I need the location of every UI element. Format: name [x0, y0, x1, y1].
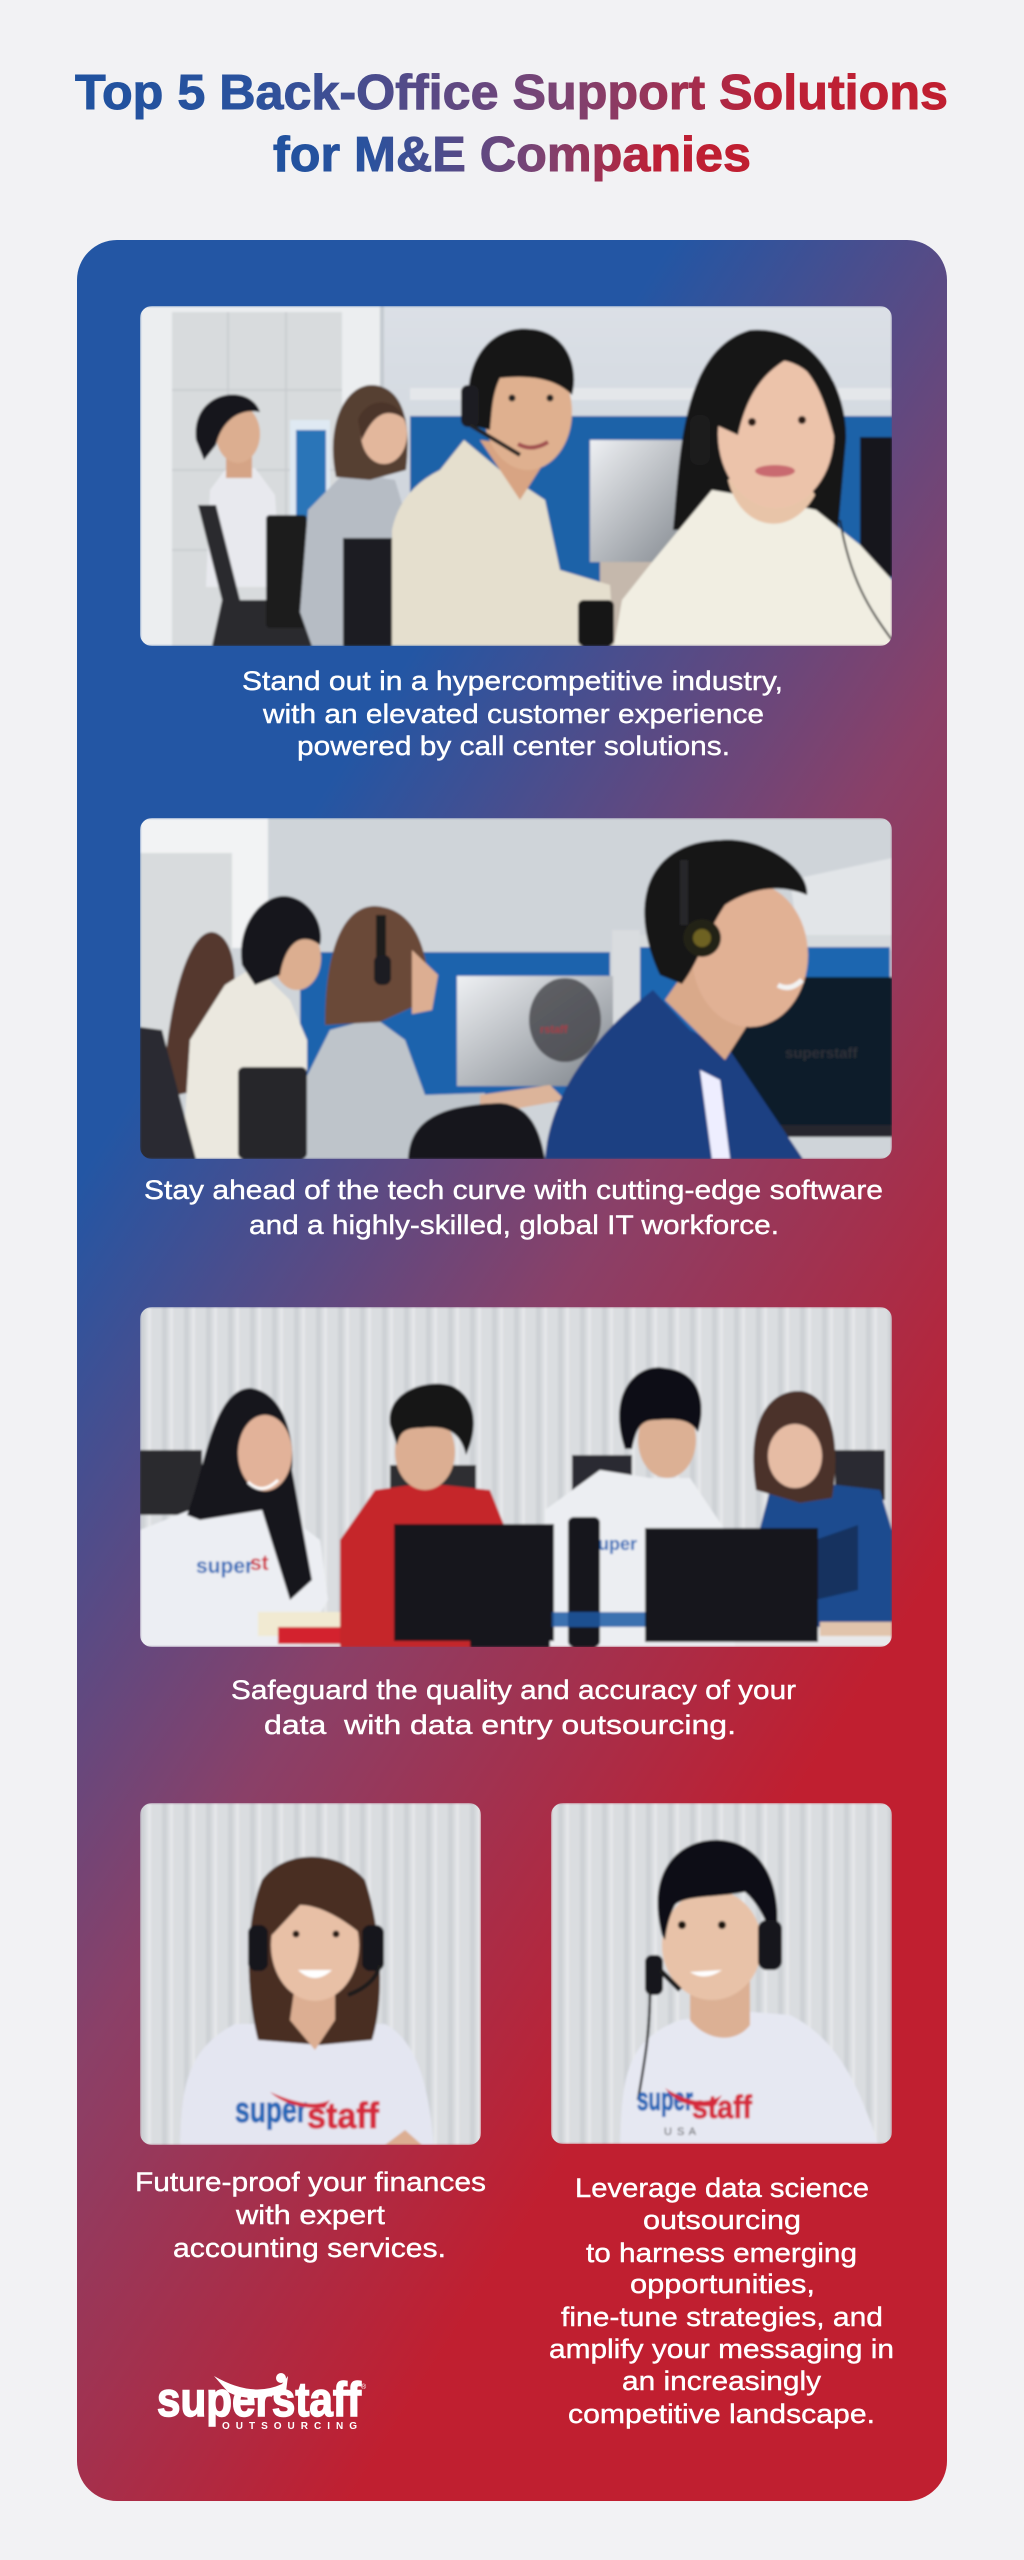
caption: data science: fine-tune strategies, and [561, 2302, 883, 2332]
photo: data science agent: staff [692, 2089, 752, 2125]
caption: data science: amplify your messaging in [549, 2334, 894, 2364]
title: Top 5 Back-Office Support Solutions [75, 66, 948, 120]
photo: accounting agent: staff [307, 2095, 380, 2136]
caption: accounting: with expert [235, 2200, 386, 2230]
photo: data science agent [551, 1803, 892, 2144]
caption: data entry: data with data entry outsourcing. [264, 1710, 736, 1740]
photo: data entry team with laptops [140, 1307, 892, 1647]
chair front [408, 1103, 545, 1159]
man in white tee: uper [598, 1534, 637, 1554]
woman in white tee: st [250, 1552, 269, 1575]
caption: tech curve: and a highly-skilled, global IT workforce. [249, 1210, 779, 1240]
woman in navy tee [741, 1391, 892, 1636]
logo: SuperStaff Outsourcing: OUTSOURCING [222, 2421, 357, 2432]
title [75, 66, 948, 182]
photo: data science agent: super [637, 2081, 693, 2117]
woman foreground [614, 330, 892, 646]
caption: data science: an increasingly [622, 2366, 822, 2396]
long-hair woman at back [163, 932, 235, 1098]
photo: call center team with headsets [140, 306, 892, 646]
man in white tee [546, 1366, 721, 1632]
caption: data science: Leverage data science [575, 2173, 869, 2203]
man with headset [390, 327, 616, 646]
laptop left [394, 1524, 554, 1641]
photo: accounting agent [140, 1803, 481, 2145]
caption: data science: opportunities, [630, 2269, 815, 2299]
title: for M&E Companies [273, 128, 751, 182]
photo: accounting agent: super [235, 2089, 307, 2130]
panel: gradient card [77, 240, 947, 2501]
caption: accounting: accounting services. [173, 2233, 446, 2263]
man in red tee [340, 1384, 506, 1647]
photo: IT workforce agents: superstaff [785, 1045, 859, 1062]
photo: IT workforce agents: rstaff [540, 1024, 568, 1036]
caption: tech curve: Stay ahead of the tech curve with cutting-edge software [144, 1175, 883, 1205]
man in cream jacket [140, 896, 321, 1159]
caption: data science: to harness emerging [586, 2238, 857, 2268]
caption: call center: with an elevated customer experience [262, 699, 764, 729]
person second left [300, 385, 408, 646]
logo: SuperStaff Outsourcing: superstaff [157, 2374, 362, 2427]
caption: call center [242, 666, 783, 761]
caption: data entry [231, 1675, 796, 1740]
man in blue blazer [545, 840, 808, 1159]
caption: call center: powered by call center solutions. [297, 731, 730, 761]
caption: data science: competitive landscape. [568, 2399, 875, 2429]
caption: accounting: Future-proof your finances [135, 2167, 486, 2197]
laptop right [645, 1528, 818, 1642]
water bottle [568, 1517, 600, 1647]
caption: accounting [135, 2167, 486, 2263]
photo: IT workforce agents [140, 818, 892, 1159]
caption: data science [549, 2173, 894, 2429]
woman in white tee [140, 1386, 342, 1646]
caption: tech curve [144, 1175, 883, 1240]
person far left [194, 393, 313, 646]
woman in gray blazer [238, 906, 565, 1159]
woman in white tee: super [196, 1555, 253, 1578]
caption: data science: outsourcing [643, 2205, 801, 2235]
caption: call center: Stand out in a hypercompetitive industry, [242, 666, 783, 696]
logo: SuperStaff Outsourcing: ® [361, 2383, 367, 2391]
photo: data science agent: U S A [664, 2126, 697, 2138]
caption: data entry: Safeguard the quality and accuracy of your [231, 1675, 796, 1705]
